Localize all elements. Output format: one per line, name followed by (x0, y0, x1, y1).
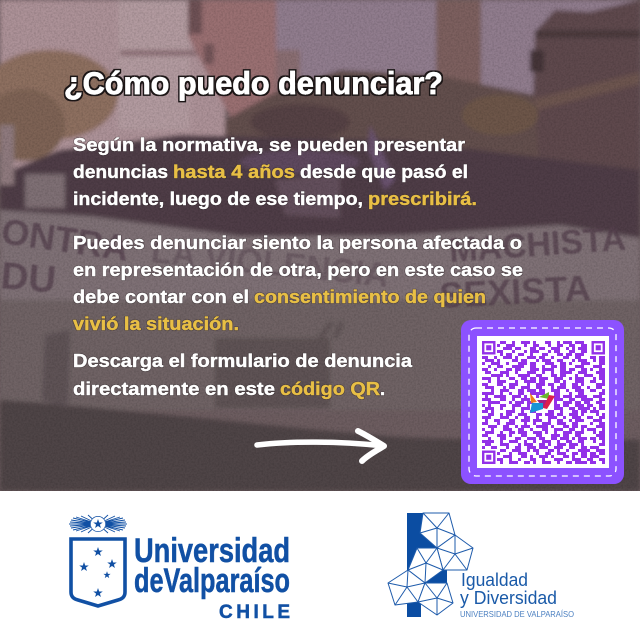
banner lettering: ONTRA (0, 210, 131, 269)
banner lettering (2, 220, 626, 308)
tower (434, 0, 482, 86)
logo: Universidad de Valparaíso (69, 515, 290, 623)
brick building (188, 0, 276, 125)
arrow pointing to QR (257, 431, 384, 461)
paragraph: quién puede denunciar: vivió la situación. (73, 313, 239, 334)
banner lettering: MACHISTA (448, 220, 627, 270)
paragraph: descarga formulario: código QR (280, 378, 380, 399)
wordmark (460, 569, 574, 619)
footer white band (0, 491, 640, 640)
right building (531, 0, 640, 170)
logo: Igualdad y Diversidad (388, 513, 574, 619)
wordmark: CHILE (219, 602, 290, 623)
paragraph: quién puede denunciar: en representación de otra, pero en este caso se (73, 259, 523, 280)
shield with Southern Cross stars (71, 539, 125, 606)
banner lettering: SEXISTA (438, 267, 592, 316)
paragraph: plazo de denuncia: incidente, luego de ese tiempo, (73, 188, 363, 209)
wordmark (134, 532, 290, 623)
distant skyline (276, 50, 300, 95)
pavement dark (0, 400, 640, 491)
wordmark: y Diversidad (460, 587, 557, 608)
mid street trees (226, 68, 536, 156)
crowd (0, 132, 640, 238)
paragraph: plazo de denuncia: denuncias (73, 161, 168, 182)
paragraph: quién puede denunciar: debe contar con el (73, 286, 249, 307)
banner lower (0, 300, 640, 410)
banner lettering: DU (0, 255, 58, 302)
paragraph: plazo de denuncia: desde que pasó el (300, 161, 468, 182)
sky (270, 0, 640, 100)
background protest photo (0, 0, 640, 491)
QR code modules (482, 341, 605, 464)
paragraph: quién puede denunciar: consentimiento de quien (254, 286, 486, 307)
QR card (461, 320, 624, 484)
left buildings (0, 0, 225, 190)
paragraph: plazo de denuncia: hasta 4 años (173, 161, 295, 182)
crowd left light patch (0, 125, 14, 185)
wordmark: deValparaíso (134, 562, 290, 600)
paper texture (0, 0, 640, 491)
banner lettering: LA VIOLENCIA (149, 232, 390, 295)
QR center bird logo (530, 392, 555, 413)
binder clip print (215, 338, 330, 408)
banner (0, 208, 640, 301)
paragraph: descarga formulario: Descarga el formulario de denuncia (73, 350, 413, 371)
tree left (0, 50, 118, 140)
paragraph: descarga formulario: . (380, 378, 385, 399)
sunburst crest (69, 515, 127, 533)
QR right-side modules (569, 342, 605, 462)
paragraph: descarga formulario: directamente en este (73, 378, 275, 399)
blue bar and facets (388, 513, 473, 617)
paragraph: quién puede denunciar (73, 232, 523, 334)
title: ¿Cómo puedo denunciar? (64, 65, 443, 101)
paragraph: plazo de denuncia: Según la normativa, se pueden presentar (73, 134, 465, 155)
wordmark: Universidad (134, 532, 290, 570)
paragraph: plazo de denuncia (73, 134, 477, 209)
paragraph: descarga formulario (73, 350, 413, 399)
wordmark: UNIVERSIDAD DE VALPARAÍSO (460, 609, 574, 619)
paragraph: quién puede denunciar: Puedes denunciar siento la persona afectada o (73, 232, 522, 253)
paragraph: plazo de denuncia: prescribirá. (368, 188, 477, 209)
wordmark: Igualdad (461, 569, 528, 590)
